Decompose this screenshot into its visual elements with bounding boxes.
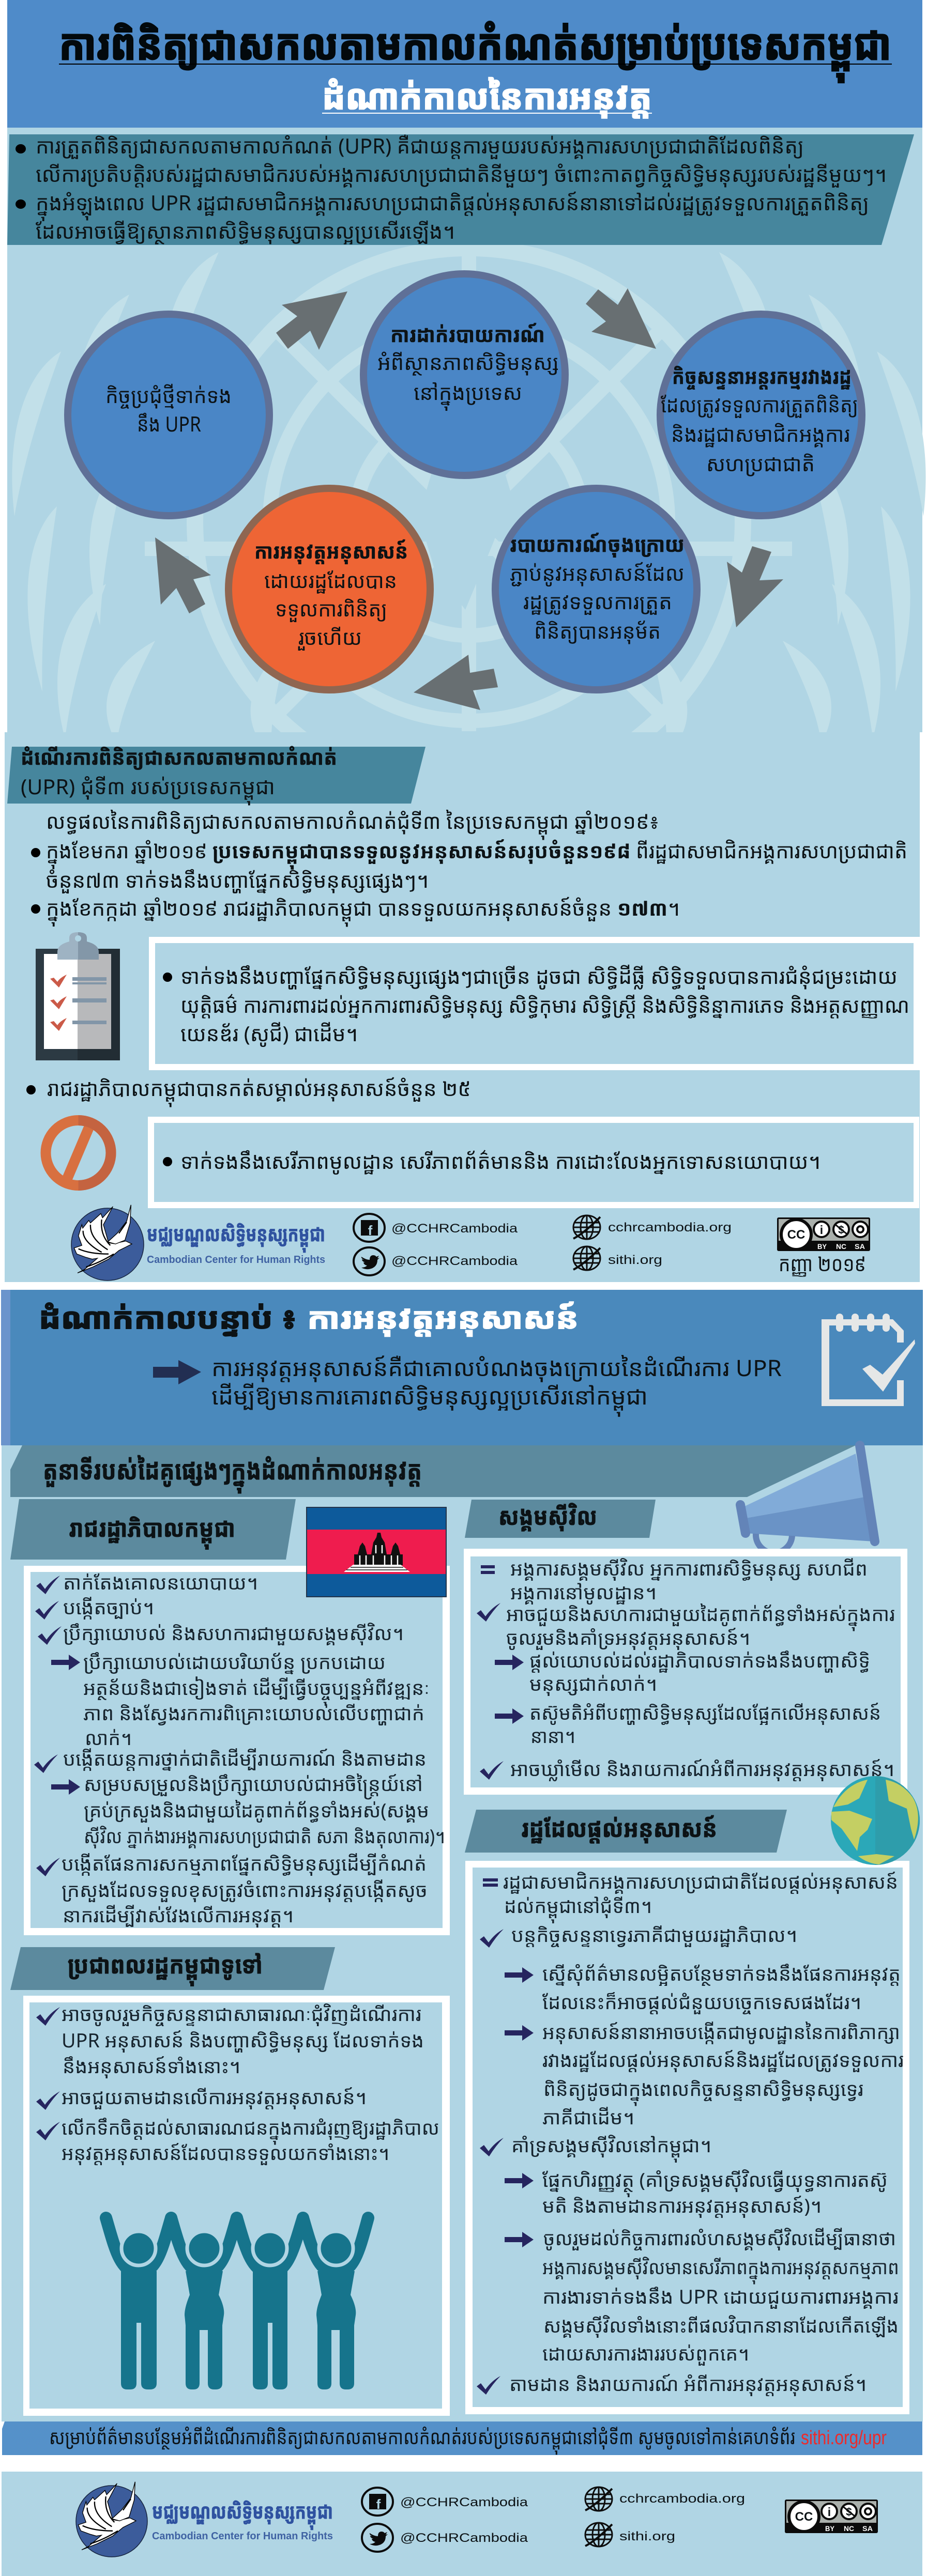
list: បង្កើតច្បាប់។ (63, 1594, 154, 1620)
social links (354, 1214, 732, 1275)
list: ក្រសួងដែលទទួលខុសត្រូវចំពោះការអនុវត្តបង្កើតសូច (62, 1876, 428, 1903)
arrow 2 (586, 288, 656, 349)
list: នាករដើម្បីវាស់វែងលើការអនុវត្ត។ (63, 1902, 294, 1928)
list: ស្នើសុំព័ត៌មានលម្អិតបន្ថែមទាក់ទងនឹងផែនការអនុវត្ត (542, 1960, 901, 1986)
list: គ្រប់ក្រសួងនិងជាមួយដៃគូពាក់ព័ន្ធទាំងអស់(សង្គម (84, 1797, 429, 1823)
list: អត្ថន័យនិងជាទៀងទាត់ ដើម្បីធ្វើបច្ចុប្បន្នអំពីវឌ្ឍនៈ (83, 1674, 430, 1706)
footer licence badge (785, 2500, 878, 2533)
icon: facebook (362, 2488, 393, 2516)
list: អង្គការនៅមូលដ្ឋាន។ (510, 1579, 657, 1605)
list: លើកទឹកចិត្តដល់សាធារណជនក្នុងការជំរុញឱ្យរដ្ឋាភិបាល (62, 2114, 439, 2145)
results text: ក្នុងខែកក្កដា ឆ្នាំ២០១៩ រាជរដ្ឋាភិបាលកម្ពុជា បានទទួលយកអនុសាសន៍ចំនួន ១៧៣។ (46, 893, 680, 927)
list: អនុសាសន៍នានាអាចបង្កើតជាមូលដ្ឋាននៃការពិភាក្សា (542, 2018, 900, 2045)
roles banner (10, 1445, 856, 1497)
logo: CCHR: មជ្ឈមណ្ឌលសិទ្ធិមនុស្សកម្ពុជា (147, 1219, 325, 1253)
description: ការអនុវត្តអនុសាសន៍គឺជាគោលបំណងចុងក្រោយនៃដំណើរការ UPR (211, 1352, 782, 1383)
list: រវាងរដ្ឋដែលផ្តល់អនុសាសន៍និងរដ្ឋដែលត្រូវទទួលការ (542, 2046, 904, 2073)
step 2 circle: ការដាក់របាយការណ៍ (390, 320, 545, 348)
top section background (7, 128, 922, 732)
card (464, 1549, 907, 1795)
step 1 circle (68, 314, 269, 516)
subtitle: ដំណាក់កាលនៃការអនុវត្ត (322, 73, 652, 119)
results text: លទ្ធផលនៃការពិនិត្យជាសកលតាមកាលកំណត់ជុំទី៣ នៃប្រទេសកម្ពុជា ឆ្នាំ២០១៩៖ (46, 807, 659, 840)
header banner (7, 0, 922, 128)
results text: ក្នុងខែមករា ឆ្នាំ២០១៩ ប្រទេសកម្ពុជាបានទទួលនូវអនុសាសន៍សរុបចំនួន១៩៨ ពីរដ្ឋជាសមាជិកអង្គការសហប្រជាជាតិ (46, 836, 907, 870)
step 3 circle (660, 314, 862, 516)
footer social links: sithi.org (619, 2529, 675, 2543)
panel: noted recommendations (148, 1117, 919, 1208)
step 5 circle: រួចហើយ (298, 623, 362, 651)
list: ពិនិត្យដូចជាក្នុងពេលកិច្ចសន្ទនាសិទ្ធិមនុស្សទ្វេរ (543, 2075, 863, 2106)
footer logo: CCHR: Cambodian Center for Human Rights (152, 2531, 333, 2542)
social links: sithi.org (608, 1253, 662, 1267)
panel: recommending states (465, 1810, 909, 2414)
results section background (5, 732, 920, 1282)
icon: facebook: f (368, 1223, 373, 1238)
label: រដ្ឋដែលផ្តល់អនុសាសន៍ (521, 1812, 717, 1844)
step 3 circle: សហប្រជាជាតិ (706, 449, 815, 477)
intro panel: ក្នុងអំឡុងពេល UPR រដ្ឋជាសមាជិកអង្គការសហប្រជាជាតិផ្តល់អនុសាសន៍នានាទៅដល់រដ្ឋត្រូវទទួលការត្រួតពិនិត្យ (36, 188, 869, 222)
footer social links: cchrcambodia.org (619, 2492, 745, 2506)
list: អាចជួយតាមដានលើការអនុវត្តអនុសាសន៍។ (62, 2084, 367, 2110)
step 2 circle: នៅក្នុងប្រទេស (414, 378, 522, 411)
list: អង្គការសង្គមស៊ីវិល អ្នកការពារសិទ្ធិមនុស្ស សហជីព (510, 1555, 868, 1581)
results text: ចំនួន៧៣ ទាក់ទងនឹងបញ្ហាផ្នែកសិទ្ធិមនុស្សផ្សេងៗ។ (46, 866, 429, 894)
icon: twitter (354, 1247, 385, 1275)
logo: CCHR (71, 1205, 325, 1281)
noted recommendations line: រាជរដ្ឋាភិបាលកម្ពុជាបានកត់សម្គាល់អនុសាសន៍ចំនួន ២៥ (47, 1074, 471, 1107)
panel: civil society (464, 1500, 907, 1795)
icon: twitter (362, 2524, 393, 2552)
label (10, 1947, 335, 1990)
list: នានា។ (530, 1722, 575, 1749)
step 3 circle: ដែលត្រូវទទួលការត្រួតពិនិត្យ (661, 390, 858, 419)
heading: ដំណាក់កាលបន្ទាប់ ៖ (39, 1298, 297, 1337)
results text (31, 807, 907, 927)
icon: megaphone (740, 1445, 875, 1553)
list: ចូលរួមនិងគាំទ្រអនុវត្តអនុសាសន៍។ (506, 1624, 750, 1651)
list (34, 1569, 445, 1928)
label (465, 1810, 787, 1853)
list: អាចចូលរួមកិច្ចសន្ទនាជាសាធារណៈជុំវិញដំណើរការ (62, 2000, 421, 2027)
icon: facebook: f (376, 2496, 381, 2512)
background watermark: UN emblem (9, 248, 927, 796)
list: ស៊ីវិល ភ្នាក់ងារអង្គការសហប្រជាជាតិ សភា និងតុលាការ)។ (84, 1823, 445, 1849)
footer background (2, 2472, 922, 2576)
label (10, 1499, 296, 1560)
list: ផ្តល់យោបល់ដល់រដ្ឋាភិបាលទាក់ទងនឹងបញ្ហាសិទ្ធិ (529, 1647, 870, 1673)
step 3 circle: កិច្ចសន្ទនាអន្តរកម្មរវាងរដ្ឋ (672, 362, 852, 390)
icon: globe (573, 1246, 600, 1270)
list: អាចឃ្លាំមើល និងរាយការណ៍អំពីការអនុវត្តអនុសាសន៍។ (510, 1755, 894, 1782)
card (465, 1861, 909, 2414)
arrow 5 (155, 537, 211, 613)
list: ភាព និងស្វែងរកការពិគ្រោះយោបល់លើបញ្ហាជាក់ (83, 1700, 424, 1726)
list: បង្កើតយន្តការថ្នាក់ជាតិដើម្បីរាយការណ៍ និងតាមដាន (63, 1745, 427, 1771)
step 3 circle: និងរដ្ឋជាសមាជិកអង្គការ (671, 420, 850, 448)
icon: clipboard (36, 932, 120, 1060)
panel: Cambodian government (10, 1499, 450, 1935)
list: UPR អនុសាសន៍ និងបញ្ហាសិទ្ធិមនុស្ស ដែលទាក់ទង (62, 2027, 424, 2053)
step 1 circle: នឹង UPR (137, 409, 201, 438)
list: អនុវត្តអនុសាសន៍ដែលបានទទួលយកទាំងនោះ។ (62, 2139, 389, 2166)
licence badge and date (777, 1217, 870, 1277)
step 4 circle: ភ្ជាប់នូវអនុសាសន៍ដែល (510, 559, 685, 587)
step 2 circle: អំពីស្ថានភាពសិទ្ធិមនុស្ស (377, 348, 559, 376)
next stage header (1, 1290, 923, 1445)
list: អង្គការសង្គមស៊ីវិលមានសេរីភាពក្នុងការអនុវត្តសកម្មភាព (542, 2254, 899, 2285)
list: ដែលនេះក៏អាចផ្តល់ជំនួយបច្ចេកទេសផងដែរ។ (542, 1988, 861, 2015)
list: តស៊ូមតិអំពីបញ្ហាសិទ្ធិមនុស្សដែលផ្អែកលើអនុសាសន៍ (529, 1699, 881, 1725)
list: ផ្នែកហិរញ្ញវត្ថុ (គាំទ្រសង្គមស៊ីវិលធ្វើយុទ្ធនាការតស៊ូ (542, 2166, 888, 2197)
list: ការងារទាក់ទងនឹង UPR ដោយជួយការពារអង្គការ (542, 2283, 899, 2309)
list: គាំទ្រសង្គមស៊ីវិលនៅកម្ពុជា។ (511, 2132, 711, 2163)
social links: cchrcambodia.org (608, 1221, 732, 1235)
step 4 circle: របាយការណ៍ចុងក្រោយ (510, 530, 685, 558)
list: តាមដាន និងរាយការណ៍ អំពីការអនុវត្តអនុសាសន៍។ (509, 2370, 867, 2397)
section heading: third cycle: (UPR) ជុំទី៣ របស់ប្រទេសកម្ពុជា (21, 772, 275, 806)
step 4 circle: ពិនិត្យបានអនុម័ត (534, 616, 661, 645)
list: ចូលរួមដល់កិច្ចការពារលំហសង្គមស៊ីវិលដើម្បីធានាថា (543, 2225, 896, 2251)
list: នឹងអនុសាសន៍ទាំងនោះ។ (63, 2053, 240, 2079)
intro panel: លើការប្រតិបត្តិរបស់រដ្ឋជាសមាជិករបស់អង្គការសហប្រជាជាតិនីមួយៗ ចំពោះកាតព្វកិច្ចសិទ្ធិមនុស្សរបស់រដ្ឋនីមួយៗ។ (36, 160, 887, 188)
list: មនុស្សជាក់លាក់។ (529, 1670, 657, 1696)
list (477, 1868, 904, 2397)
roles banner: តួនាទីរបស់ដៃគូផ្សេងៗក្នុងដំណាក់កាលអនុវត្ត (43, 1452, 422, 1494)
logo: CCHR: Cambodian Center for Human Rights (147, 1254, 325, 1266)
footer logo: CCHR (76, 2482, 333, 2557)
icon: globe (585, 2523, 612, 2547)
section heading: third cycle: ដំណើរការពិនិត្យជាសកលតាមកាលកំណត់ (21, 743, 337, 771)
panel: accepted recommendations: យេនឌ័រ (សូជី) ជាដើម។ (180, 1019, 358, 1047)
step 1 circle: កិច្ចប្រជុំថ្មីទាក់ទង (105, 381, 232, 409)
list (477, 1555, 895, 1782)
social links: @CCHRCambodia (391, 1254, 518, 1268)
icon: Cambodian flag (307, 1507, 446, 1597)
panel: accepted recommendations: យុត្តិធម៌ ការការពារដល់អ្នកការពារសិទ្ធិមនុស្ស សិទ្ធិកុមារ សិទ្ធិស្ត្រី និងសិទ្ធិនិន្នាការភេទ និងអត្តសញ្ញាណ (180, 991, 909, 1019)
intro panel: ដែលអាចធ្វើឱ្យស្ថានភាពសិទ្ធិមនុស្សបានល្អប្រសើរឡើង។ (36, 217, 455, 245)
panel: accepted recommendations: ទាក់ទងនឹងបញ្ហាផ្នែកសិទ្ធិមនុស្សផ្សេងៗជាច្រើន ដូចជា សិទ្ធិដីធ្លី សិទ្ធិទទួលបានការជំនុំជម្រះដោយ (180, 962, 898, 990)
next stage header: ដើម្បីឱ្យមានការគោរពសិទ្ធិមនុស្សល្អប្រសើរនៅកម្ពុជា (211, 1380, 648, 1417)
licence badge and date: កញ្ញា ២០១៩ (779, 1249, 866, 1277)
list: ដល់កម្ពុជានៅជុំទី៣។ (504, 1892, 652, 1923)
list: មតិ និងតាមដានការអនុវត្តអនុសាសន៍)។ (542, 2192, 822, 2218)
arrow (153, 1360, 201, 1384)
step 5 circle (229, 488, 430, 690)
list: បង្កើតផែនការសកម្មភាពផ្នែកសិទ្ធិមនុស្សដើម្បីកំណត់ (62, 1850, 427, 1876)
step 5 circle: ទទួលការពិនិត្យ (275, 594, 387, 623)
label: ប្រជាពលរដ្ឋកម្ពុជាទូទៅ (68, 1949, 263, 1986)
list: រដ្ឋជាសមាជិកអង្គការសហប្រជាជាតិដែលផ្តល់អនុសាសន៍ (503, 1868, 898, 1894)
icon: globe (573, 1215, 600, 1239)
footer social links (362, 2487, 745, 2552)
section heading: third cycle (7, 743, 425, 806)
step 2 circle (363, 274, 565, 475)
label: សង្គមស៊ីវិល (498, 1500, 597, 1532)
list: លាក់។ (85, 1724, 132, 1751)
list: ប្រឹក្សាយោបល់ដោយបរិយាប័ន្ន ប្រកបដោយ (83, 1648, 386, 1675)
list: ភាគីជាដើម។ (542, 2104, 634, 2130)
next stage header: ការអនុវត្តអនុសាសន៍ (307, 1298, 579, 1337)
footer social links: @CCHRCambodia (400, 2495, 528, 2509)
card (23, 1996, 450, 2416)
footer social links: @CCHRCambodia (400, 2531, 528, 2545)
list (36, 2000, 439, 2166)
list: សម្របសម្រួលនិងប្រឹក្សាយោបល់ជាអចិន្ត្រៃយ៍នៅ (84, 1770, 423, 1800)
stakeholder section background (2, 1445, 923, 2421)
icon: facebook (354, 1214, 385, 1242)
step 4 circle (495, 488, 697, 690)
label: រាជរដ្ឋាភិបាលកម្ពុជា (69, 1512, 235, 1550)
card (24, 1566, 450, 1935)
list: តាក់តែងគោលនយោបាយ។ (63, 1569, 258, 1595)
intro panel (7, 131, 914, 245)
panel: general public (10, 1947, 450, 2416)
arrow 1 (276, 291, 347, 350)
step 5 circle: ដោយរដ្ឋដែលបាន (264, 566, 397, 594)
list: បន្តកិច្ចសន្ទនាទ្វេរភាគីជាមួយរដ្ឋាភិបាល។ (511, 1921, 797, 1948)
footer logo: CCHR: មជ្ឈមណ្ឌលសិទ្ធិមនុស្សកម្ពុជា (152, 2496, 333, 2531)
list: ប្រឹក្សាយោបល់ និងសហការជាមួយសង្គមស៊ីវិល។ (63, 1619, 404, 1646)
panel: accepted recommendations (149, 937, 920, 1070)
icon: checklist note (822, 1314, 915, 1406)
cycle diagram (68, 274, 862, 710)
icon: globe (585, 2487, 612, 2511)
panel: noted recommendations: ទាក់ទងនឹងសេរីភាពមូលដ្ឋាន សេរីភាពព័ត៌មាននិង ការដោះលែងអ្នកទោសនយោបាយ។ (180, 1147, 820, 1175)
step 5 circle: ការអនុវត្តអនុសាសន៍ (254, 536, 408, 565)
icon: earth globe (831, 1776, 920, 1865)
icon: prohibition sign (45, 1115, 116, 1191)
list: អាចជួយនិងសហការជាមួយដៃគូពាក់ព័ន្ធទាំងអស់ក្នុងការ (506, 1600, 895, 1631)
social links: @CCHRCambodia (391, 1222, 518, 1236)
list: សង្គមស៊ីវិលទាំងនោះពីផលវិបាកនានាដែលកើតឡើង (543, 2312, 899, 2338)
arrow 4 (414, 655, 498, 710)
footer call to action: sithi.org/upr (801, 2427, 887, 2449)
label (465, 1500, 656, 1538)
icon: people holding hands (106, 2218, 368, 2389)
intro panel: ការត្រួតពិនិត្យជាសកលតាមកាលកំណត់ (UPR) គឺជាយន្តការមួយរបស់អង្គការសហប្រជាជាតិដែលពិនិត្យ (36, 131, 804, 160)
arrow 3 (727, 546, 783, 627)
list: ដោយសារការងាររបស់ពួកគេ។ (542, 2340, 749, 2366)
footer call to action: សម្រាប់ព័ត៌មានបន្ថែមអំពីដំណើរការពិនិត្យជាសកលតាមកាលកំណត់របស់ប្រទេសកម្ពុជានៅជុំទី៣ សូមចូលទៅកាន់គេហទំព័រ (49, 2424, 795, 2455)
step 4 circle: រដ្ឋត្រូវទទួលការត្រួត (523, 587, 672, 615)
